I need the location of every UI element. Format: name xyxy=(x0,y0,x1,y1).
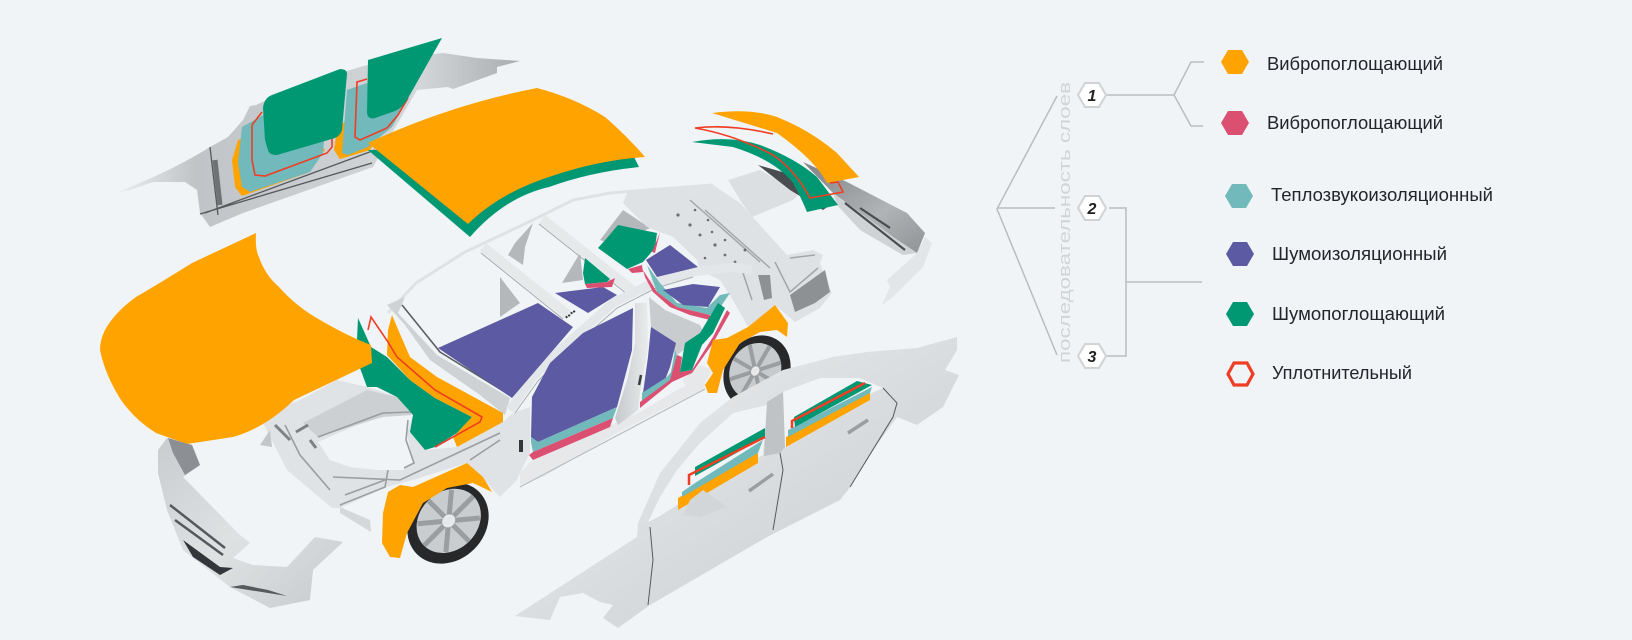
front window green xyxy=(695,428,765,476)
green panel, front door xyxy=(263,69,347,155)
step 1 xyxy=(1078,83,1106,107)
hinge pillar details xyxy=(519,440,523,452)
hood xyxy=(100,233,372,444)
legend: teal: Теплозвукоизоляционный xyxy=(1271,184,1493,205)
red outline, front door xyxy=(252,112,332,176)
step 1: 1 xyxy=(1088,88,1097,105)
bumper lower structure xyxy=(833,193,917,255)
pink rear sill xyxy=(640,310,730,408)
near roof rail xyxy=(510,267,752,410)
gray side panel xyxy=(115,53,520,227)
orange layer, front door xyxy=(232,120,325,196)
teal front door sill xyxy=(531,407,617,452)
front structure xyxy=(263,380,530,508)
side doors outer panel xyxy=(515,337,959,628)
purple rear seat xyxy=(646,245,698,277)
front lower splash xyxy=(340,507,371,532)
red firewall outline xyxy=(368,317,482,447)
front door window opening xyxy=(648,405,767,522)
legend: red outline xyxy=(1228,362,1412,385)
purple rear lower xyxy=(663,284,720,307)
legend: orange: Вибропоглощающий xyxy=(1267,53,1443,74)
connector lines xyxy=(1106,62,1204,356)
front window orange xyxy=(678,453,758,510)
front window red xyxy=(689,437,765,485)
rear wheel xyxy=(710,323,804,421)
top rail xyxy=(303,390,412,437)
step 3 xyxy=(1078,344,1106,368)
green seat panel xyxy=(598,225,657,269)
front window teal xyxy=(682,440,763,497)
trunk lid xyxy=(728,170,800,217)
legend xyxy=(1221,50,1493,385)
far pillars xyxy=(500,210,650,317)
legend: orange xyxy=(1221,50,1443,74)
bracket lines xyxy=(997,96,1057,355)
bumper upper band xyxy=(803,162,925,253)
green panel, rear door xyxy=(367,38,442,118)
purple rear door opening xyxy=(643,327,676,393)
mirror xyxy=(683,490,727,517)
purple mid floor xyxy=(555,287,617,313)
legend: red outline: Уплотнительный xyxy=(1272,362,1412,383)
rear wheel arch xyxy=(705,305,788,393)
rear window orange xyxy=(786,393,870,447)
roof cross bows xyxy=(483,247,568,315)
front bumper xyxy=(158,438,343,608)
engine bay details xyxy=(285,412,500,505)
vertical caption: последовательность слоев xyxy=(1055,82,1074,363)
rear door inner xyxy=(649,297,707,355)
bumper dark inner xyxy=(758,165,833,210)
roof panel xyxy=(368,88,645,237)
sill xyxy=(520,377,705,485)
legend: purple: Шумоизоляционный xyxy=(1272,243,1447,264)
roof green layer xyxy=(368,150,639,237)
inner dark panel xyxy=(168,438,200,475)
insulation layers on the car xyxy=(357,225,730,460)
rear-shelf details xyxy=(676,209,746,263)
roof orange layer xyxy=(368,88,645,224)
a-pillar xyxy=(387,297,510,415)
fender green layer xyxy=(692,139,838,212)
teal rear arc xyxy=(647,265,730,315)
legend: purple xyxy=(1226,242,1447,266)
rear sill box xyxy=(682,365,713,388)
pink rear arc xyxy=(643,270,710,320)
rear window opening xyxy=(783,378,883,447)
red outline, rear door xyxy=(355,79,408,140)
rear window teal xyxy=(788,387,872,437)
fender red outline xyxy=(695,127,843,198)
legend: green xyxy=(1226,302,1445,326)
b-pillar xyxy=(615,303,648,425)
teal rear sill xyxy=(642,350,677,402)
rear window red xyxy=(792,383,865,428)
rear quarter shade xyxy=(758,270,830,312)
front wheel arch xyxy=(382,463,492,558)
purple front door opening xyxy=(531,308,633,442)
legend: pink: Вибропоглощающий xyxy=(1267,112,1443,133)
engine bay opening xyxy=(318,415,413,470)
step 3: 3 xyxy=(1088,349,1097,366)
far roof rail xyxy=(388,185,713,313)
green firewall layer xyxy=(357,318,472,450)
pink front door sill xyxy=(529,418,613,460)
exploded side inner panel with layers xyxy=(115,38,520,227)
radiator tab xyxy=(260,430,272,447)
pink small strips xyxy=(585,232,660,288)
step 2: 2 xyxy=(1087,201,1097,218)
door seams and handles xyxy=(648,388,897,605)
green small panel xyxy=(583,258,610,284)
rear bumper and trunk xyxy=(692,111,932,305)
teal layer, front door xyxy=(238,100,325,192)
legend: green: Шумопоглощающий xyxy=(1272,303,1445,324)
orange layer, rear door xyxy=(334,110,385,159)
front wheel xyxy=(391,466,505,580)
layer sequence tree xyxy=(997,62,1204,368)
green rear bar xyxy=(680,303,725,372)
step 2 xyxy=(1078,196,1106,220)
grille xyxy=(183,540,233,575)
car body shell xyxy=(260,185,832,532)
teal layer, rear door xyxy=(342,83,407,155)
rear shelf xyxy=(623,185,832,327)
rear window green xyxy=(794,381,872,427)
fender orange layer xyxy=(712,111,859,183)
b-pillar between windows xyxy=(764,392,785,456)
bow bolts xyxy=(565,311,575,318)
bumper lip xyxy=(882,237,932,305)
orange firewall layer xyxy=(387,315,503,447)
purple floor, front xyxy=(438,303,573,398)
legend: pink xyxy=(1221,111,1443,135)
